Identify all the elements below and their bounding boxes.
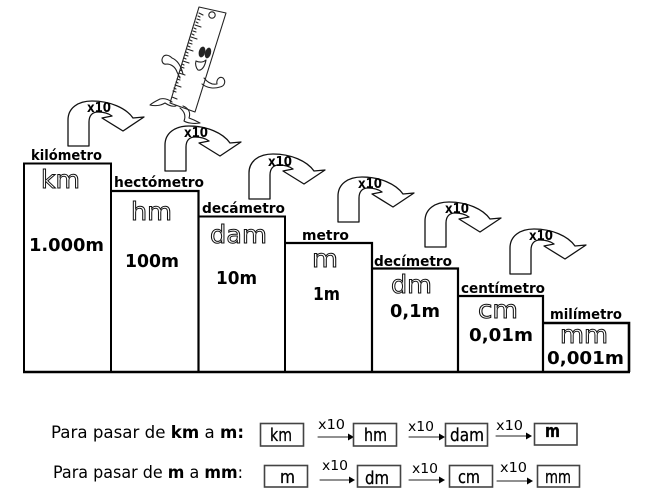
heading: kilómetro: kilómetro [31,148,102,164]
conversion row: m to mm [53,458,580,489]
heading: hectómetro: hectómetro [114,175,204,191]
box: m: m [545,421,560,442]
arrow: x10 dm to cm [425,202,501,247]
text: row 2 label: Para pasar de m a mm: [53,463,243,482]
icon: ruler character [150,7,226,123]
box: cm: cm [458,467,480,488]
heading: centímetro: centímetro [461,281,545,297]
arrow: x10 dm to cm: x10 [445,202,469,217]
panel: mm [543,323,629,372]
value: 0,1m: 0,1m [390,301,440,322]
unit: dam: dam [210,220,267,249]
box: dam: dam [450,425,484,446]
arrow: x10 [318,417,354,440]
arrow: x10: x10 [496,418,523,434]
box: cm [450,466,492,488]
conversion row: km to m [51,417,577,446]
arrow: x10: x10 [322,458,348,474]
arrow: x10 hm to dam: x10 [184,126,208,141]
panel: km [24,164,111,372]
box: dm [358,466,400,489]
box: m [534,421,577,445]
panel: dm [372,268,458,372]
arrow: x10 [320,458,355,484]
value: 10m: 10m [216,268,257,289]
unit: hm: hm [131,197,172,226]
arrow: x10 cm to mm: x10 [529,229,553,244]
box: m: m [280,467,295,488]
arrow: x10 km to hm [68,101,144,146]
arrow: x10 [409,461,445,484]
unit: cm: cm [478,295,518,324]
arrow: x10: x10 [318,417,345,433]
arrow: x10: x10 [500,460,527,476]
box: km: km [270,425,292,446]
value: 0,001m: 0,001m [547,348,624,369]
arrow: x10 [497,460,533,484]
unit: m: m [312,244,338,273]
box: m [264,466,308,488]
arrow: x10 km to hm: x10 [87,101,111,116]
arrow: x10: x10 [412,461,438,477]
value: 100m: 100m [125,251,179,272]
heading: decámetro: decámetro [202,201,285,217]
step chart: unit boxes [23,164,630,372]
arrow: x10 [496,418,532,440]
arrow: x10: x10 [408,419,434,435]
box: hm: hm [364,425,387,446]
box: dm: dm [365,468,389,489]
arrow: x10 dam to m [249,154,325,199]
heading: milímetro: milímetro [550,307,622,323]
value: 1m: 1m [313,284,340,305]
arrow: x10 [408,419,445,440]
unit: km: km [41,165,80,194]
baseline [23,371,630,373]
panel: hm [111,191,198,372]
panel: dam [198,216,285,372]
panel: cm [458,296,543,372]
arrow: x10 m to dm: x10 [358,177,382,192]
box: mm: mm [545,467,571,488]
value: 1.000m: 1.000m [29,235,104,256]
unit: dm: dm [391,270,432,299]
arrow: x10 dam to m: x10 [268,155,292,170]
arrow: x10 cm to mm [510,229,586,274]
text: row 1 label: Para pasar de km a m: [51,423,244,442]
arrow: x10 m to dm [338,177,414,222]
arrow: x10 hm to dam [165,126,241,171]
box: km [260,424,304,446]
value: 0,01m: 0,01m [469,325,533,346]
unit: mm: mm [560,320,608,349]
heading: metro: metro [302,228,349,244]
panel: m [285,243,372,372]
box: hm [354,424,396,446]
heading: decímetro: decímetro [374,254,452,270]
